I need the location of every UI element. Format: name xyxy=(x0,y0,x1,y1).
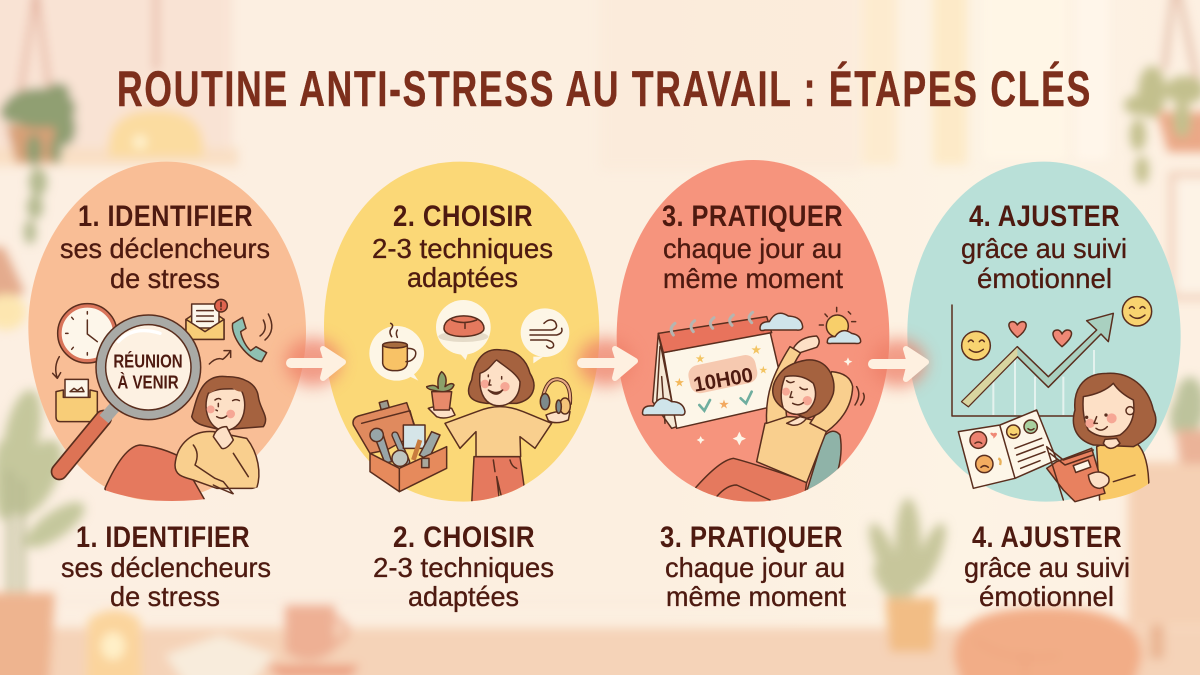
person reading xyxy=(1047,373,1156,507)
caption 3: chaque jour au xyxy=(665,552,845,583)
icon: magnifying glass: À VENIR xyxy=(117,371,179,392)
bubble: coffee xyxy=(369,323,424,381)
illustration 4 xyxy=(952,297,1156,507)
icon: magnifying glass: RÉUNION xyxy=(113,350,183,371)
candle xyxy=(86,610,142,675)
lamp and shelf xyxy=(0,148,238,166)
floor and baseboard xyxy=(0,600,1200,603)
cup and saucer xyxy=(265,665,360,675)
caption 2: adaptées xyxy=(408,581,519,612)
subtitle 1 line 2: de stress xyxy=(110,263,220,294)
caption 2: 2. CHOISIR xyxy=(393,521,535,554)
icon: smileys and hearts xyxy=(962,297,1152,360)
pouf xyxy=(954,607,1141,675)
plant lower-centre xyxy=(863,498,952,605)
right plant xyxy=(1170,377,1200,436)
subtitle 4 line 1: grâce au suivi xyxy=(961,233,1127,264)
chart xyxy=(952,305,1113,416)
sparkles xyxy=(697,357,852,445)
subtitle 3 line 1: chaque jour au xyxy=(663,233,842,264)
panel: step 1 identifier xyxy=(28,162,306,503)
panel: step 4 ajuster xyxy=(907,162,1181,507)
caption 1: de stress xyxy=(110,581,220,612)
caption 2 xyxy=(373,521,554,612)
subtitle 2 line 1: 2-3 techniques xyxy=(372,233,553,264)
caption 1: 1. IDENTIFIER xyxy=(76,521,250,554)
calendar: ★ xyxy=(718,397,730,411)
caption 3: 3. PRATIQUER xyxy=(660,521,843,554)
person thinking xyxy=(105,376,266,503)
icon: envelope with alert xyxy=(186,299,227,339)
caption 3 xyxy=(660,521,846,612)
top-left wall panel xyxy=(0,0,232,165)
panel: step 3 pratiquer xyxy=(617,160,889,507)
open mood journal xyxy=(958,410,1057,488)
caption 2: 2-3 techniques xyxy=(373,552,554,583)
illustration 1 xyxy=(53,299,272,503)
caption 4: grâce au suivi xyxy=(964,552,1130,583)
heading 1: 1. IDENTIFIER xyxy=(78,200,253,233)
calendar xyxy=(653,312,787,428)
blob 1 xyxy=(28,162,306,501)
arrow 1 to 2 xyxy=(285,338,343,386)
blob 4 xyxy=(907,162,1181,502)
furniture right xyxy=(1128,462,1200,627)
caption 1: ses déclencheurs xyxy=(61,552,271,583)
caption 4 xyxy=(964,521,1130,612)
big plant lower-left xyxy=(0,386,91,556)
blob 3 xyxy=(617,160,889,502)
illustration 2 xyxy=(353,300,570,505)
book xyxy=(165,635,275,675)
pot left xyxy=(0,593,55,675)
person with plant and headphones xyxy=(427,350,570,505)
calendar: ★ xyxy=(751,343,762,357)
bubble: breath wind xyxy=(521,308,569,363)
icon: phone xyxy=(209,314,272,364)
subtitle 2 line 2: adaptées xyxy=(407,262,518,293)
blob 2 xyxy=(324,162,599,502)
arrow 3 to 4 xyxy=(870,339,926,387)
top-left plant xyxy=(6,125,61,163)
heading 2: 2. CHOISIR xyxy=(393,200,533,233)
clouds and sun xyxy=(642,307,861,415)
top-right plant xyxy=(1157,112,1200,152)
caption 4: 4. AJUSTER xyxy=(972,521,1122,554)
subtitle 1 line 1: ses déclencheurs xyxy=(60,233,270,264)
icon: magnifying glass xyxy=(59,315,201,472)
subtitle 3 line 2: même moment xyxy=(663,263,843,294)
calendar: ★ xyxy=(759,364,769,376)
icon: clock xyxy=(58,304,117,363)
calendar: ★ xyxy=(695,354,705,366)
caption 1 xyxy=(61,521,271,612)
left lamp xyxy=(0,247,25,300)
heading 3: 3. PRATIQUER xyxy=(662,200,843,233)
subtitle 4 line 2: émotionnel xyxy=(977,263,1112,294)
frame right xyxy=(1172,175,1200,297)
arrow 2 to 3 xyxy=(578,338,635,386)
calendar: ★ xyxy=(674,376,685,390)
ropes xyxy=(20,0,156,95)
caption 3: même moment xyxy=(666,581,846,612)
illustration 3 xyxy=(642,307,864,507)
panel: step 2 choisir xyxy=(324,162,599,505)
calendar: 10H00 xyxy=(692,364,755,397)
caption 4: émotionnel xyxy=(979,581,1114,612)
bubble: cushion xyxy=(436,300,491,360)
heading 4: 4. AJUSTER xyxy=(969,200,1120,233)
icon: tray with paper xyxy=(53,357,97,422)
curtains and window xyxy=(862,0,897,165)
person stretching on chair xyxy=(695,336,864,507)
toolbox xyxy=(353,400,447,492)
